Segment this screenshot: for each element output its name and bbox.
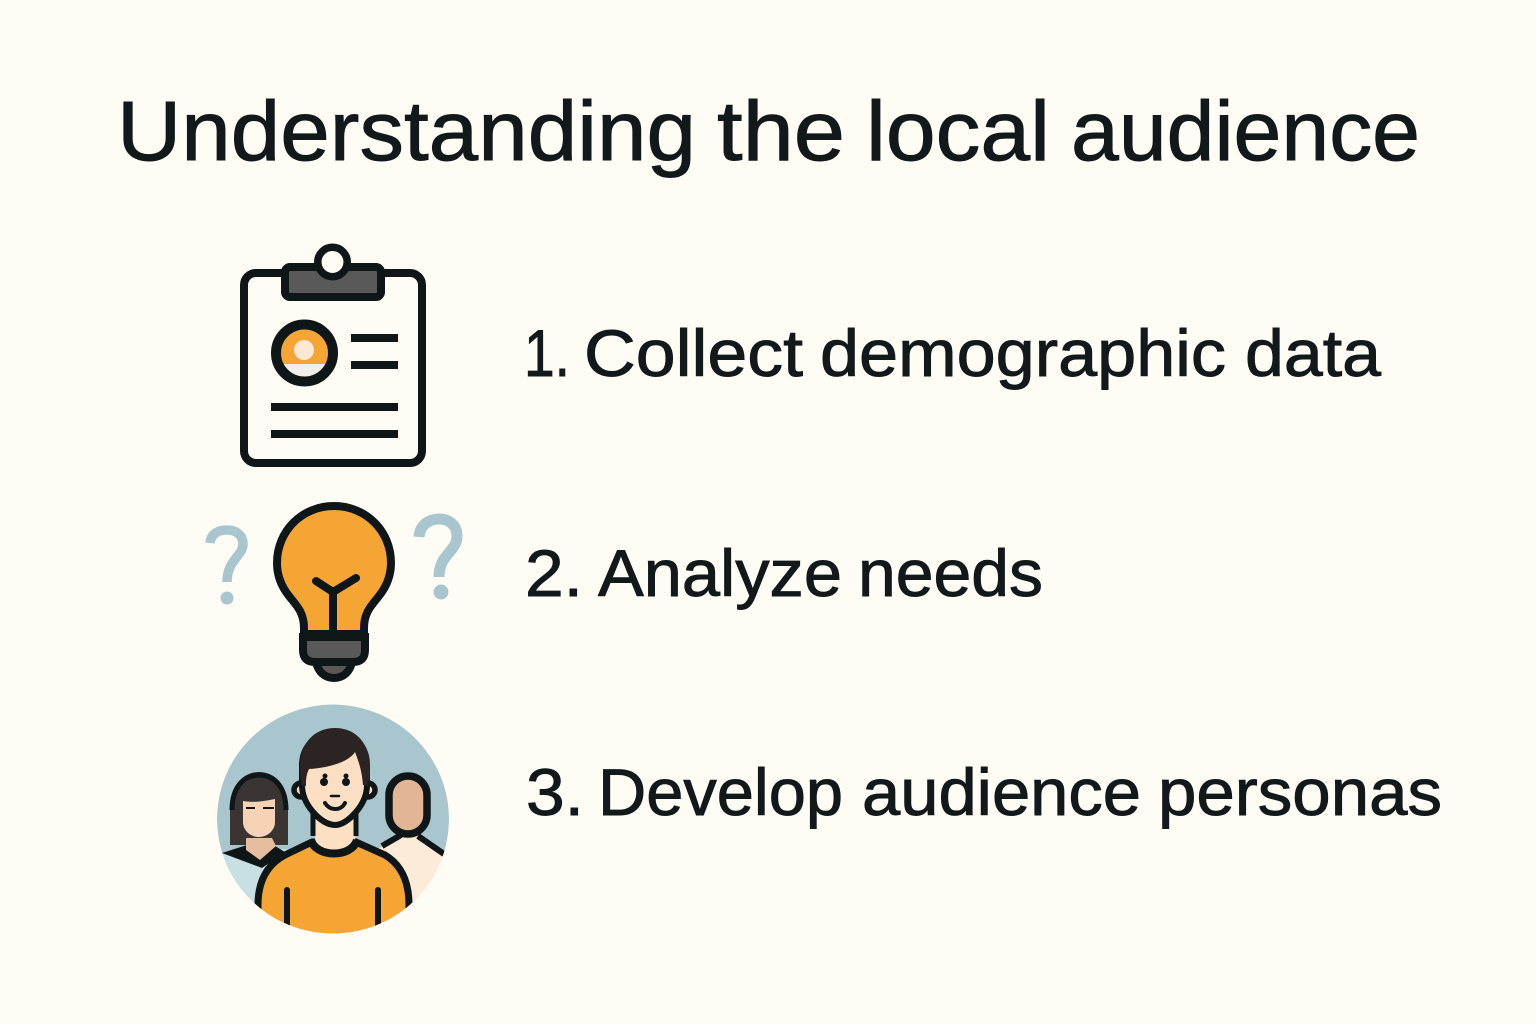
icon: right question mark (419, 519, 457, 577)
step 2 text: Analyze (598, 536, 842, 610)
step 1 text: data (1245, 316, 1381, 390)
step 1 text: 1. (524, 316, 570, 390)
title: local (866, 84, 1050, 178)
title: Understanding (117, 84, 696, 178)
person: left woman (222, 772, 288, 923)
icon: left question mark (210, 530, 243, 582)
title: the (717, 84, 845, 178)
step 3 text: Develop (598, 755, 843, 829)
title: audience (1071, 84, 1420, 178)
icon: clipboard with profile (244, 247, 422, 463)
step 2 text: 2. (525, 536, 583, 610)
icon: audience group (210, 704, 450, 945)
step 2 text: needs (858, 536, 1043, 610)
step 3 text: 3. (526, 755, 584, 829)
step 3 text: personas (1158, 755, 1442, 829)
step 3 text: audience (862, 755, 1141, 829)
step 1 text: Collect (584, 316, 803, 390)
icon: bulb (277, 506, 391, 678)
left question dot (220, 592, 234, 604)
icon: light bulb with question marks (210, 506, 457, 678)
person: right man (378, 772, 444, 923)
person: centre man (258, 728, 409, 945)
right question dot (434, 584, 448, 600)
step 1 text: demographic (820, 316, 1226, 390)
